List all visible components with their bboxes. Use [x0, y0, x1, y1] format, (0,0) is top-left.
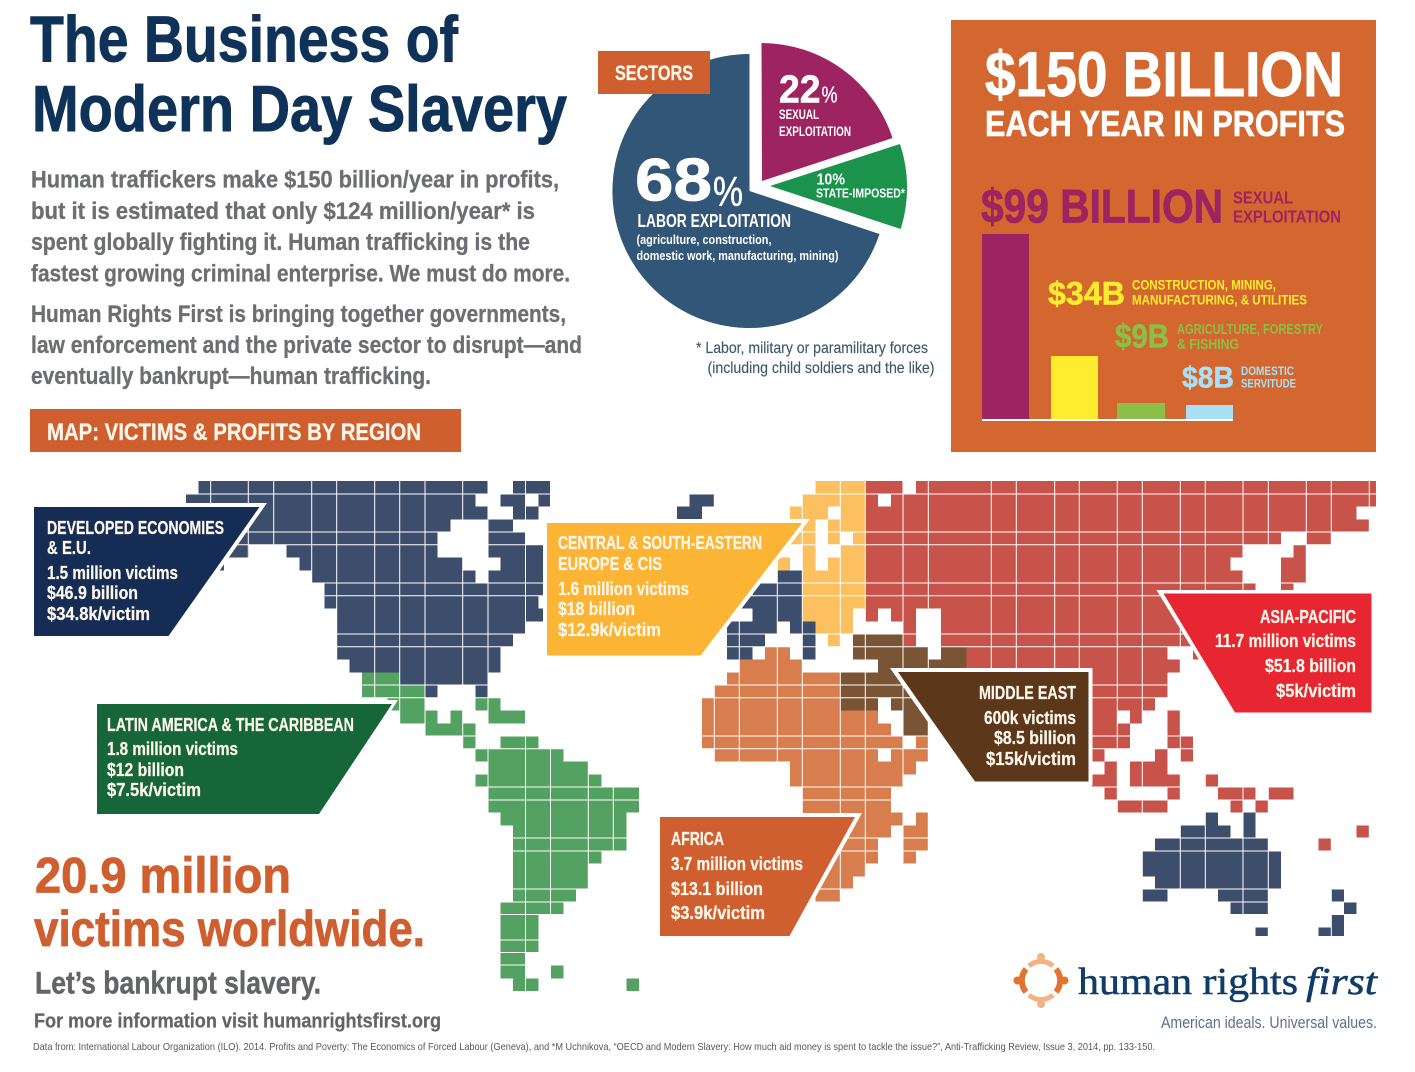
callout: asia-pacific: $5k/victim	[1276, 681, 1356, 701]
label: 68% labor: 68	[635, 146, 712, 214]
callout: central and south-eastern europe: $12.9k/victim	[558, 620, 661, 640]
bar label: sexual exploitation: SEXUAL	[1233, 188, 1293, 208]
label: 22% sexual: %	[822, 82, 838, 108]
bar label: construction: $34B	[1048, 275, 1125, 311]
callout: latin america: 1.8 million victims	[107, 739, 238, 759]
callout: central and south-eastern europe: $18 billion	[558, 599, 635, 619]
intro text: eventually bankrupt—human trafficking.	[31, 363, 431, 390]
callout: africa: $3.9k/victim	[671, 903, 765, 923]
pie slice: state-imposed	[770, 144, 907, 229]
wordmark	[1078, 961, 1379, 1003]
label: 68% labor: %	[713, 168, 743, 215]
big statistic	[34, 848, 425, 957]
bar label: construction	[1048, 275, 1307, 311]
intro text: law enforcement and the private sector to disrupt—and	[31, 332, 582, 359]
big statistic: 20.9 million	[35, 848, 291, 904]
footnote: * Labor, military or paramilitary forces	[696, 340, 928, 357]
label: 10% state-imposed: 10%	[816, 172, 845, 188]
call to action: Let’s bankrupt slavery.	[35, 964, 321, 1000]
intro text: Human traffickers make $150 billion/year in profits,	[31, 167, 559, 194]
profits headline: $150 BILLION	[985, 40, 1343, 110]
region: asia-pacific	[866, 481, 1376, 851]
callout: africa: $13.1 billion	[671, 879, 763, 899]
callout: developed economies: & E.U.	[47, 538, 91, 558]
profits headline	[985, 40, 1345, 144]
callout: central and south-eastern europe: EUROPE & CIS	[558, 554, 662, 574]
panel: sectors pie chart	[598, 43, 907, 328]
callout: developed economies: DEVELOPED ECONOMIES	[47, 518, 224, 538]
callout: middle east	[890, 668, 1092, 785]
callout: latin america: $12 billion	[107, 760, 184, 780]
callout: africa: AFRICA	[671, 829, 724, 849]
title	[30, 2, 567, 145]
intro text: Human Rights First is bringing together governments,	[31, 301, 566, 328]
intro text	[31, 167, 582, 390]
bar label: sexual exploitation: $99 BILLION	[981, 180, 1223, 233]
callout: asia-pacific: $51.8 billion	[1265, 656, 1356, 676]
profits headline: EACH YEAR IN PROFITS	[985, 103, 1345, 144]
bar label: sexual exploitation: EXPLOITATION	[1233, 207, 1341, 227]
map heading	[30, 409, 461, 452]
callout: central and south-eastern europe: CENTRAL & SOUTH-EASTERN	[558, 533, 762, 553]
callout: central and south-eastern europe	[543, 519, 810, 659]
callout: africa	[656, 813, 862, 940]
website line: For more information visit humanrightsfirst.org	[34, 1011, 441, 1033]
label: 68% labor: LABOR EXPLOITATION	[638, 211, 791, 231]
label: 22% sexual: SEXUAL	[779, 107, 819, 122]
region: africa	[702, 647, 929, 902]
region: latin america	[362, 672, 639, 991]
label: 68% labor: domestic work, manufacturing, mining)	[636, 249, 838, 263]
panel: profits	[951, 20, 1376, 452]
bar label: construction: CONSTRUCTION, MINING,	[1132, 277, 1276, 292]
callout: central and south-eastern europe: 1.6 million victims	[558, 579, 689, 599]
wordmark: first	[1306, 961, 1379, 1003]
footnote	[696, 340, 934, 377]
label: 68% labor: (agriculture, construction,	[636, 233, 772, 247]
map heading: MAP: VICTIMS & PROFITS BY REGION	[47, 419, 421, 446]
region: middle east	[840, 634, 966, 736]
callout: developed economies: $34.8k/victim	[47, 604, 150, 624]
icon: ring of people	[1014, 953, 1068, 1008]
callout: asia-pacific: ASIA-PACIFIC	[1260, 607, 1356, 627]
pie slice: labor exploitation	[612, 54, 880, 328]
callout: developed economies: 1.5 million victims	[47, 563, 178, 583]
bar label: domestic servitude	[1182, 361, 1296, 394]
title: Modern Day Slavery	[32, 72, 567, 145]
callout: asia-pacific	[1156, 590, 1373, 714]
label: 22% sexual: 22	[779, 69, 820, 112]
callout: asia-pacific: 11.7 million victims	[1215, 631, 1356, 651]
callout: middle east: $15k/victim	[986, 749, 1076, 769]
bar label: domestic servitude: SERVITUDE	[1241, 377, 1296, 391]
region: developed economies	[186, 481, 1356, 936]
callout: latin america	[93, 700, 398, 818]
bar label: agriculture: AGRICULTURE, FORESTRY	[1177, 322, 1323, 338]
callout: middle east: MIDDLE EAST	[979, 683, 1076, 703]
label: 10% state-imposed	[816, 172, 906, 200]
callout: middle east: $8.5 billion	[994, 728, 1076, 748]
bar chart	[982, 234, 1233, 421]
label: 10% state-imposed: STATE-IMPOSED*	[816, 186, 906, 200]
callout: developed economies: $46.9 billion	[47, 583, 138, 603]
bar label: agriculture	[1115, 318, 1323, 355]
callout: middle east: 600k victims	[984, 708, 1076, 728]
data source: Data from: International Labour Organization (ILO). 2014. Profits and Poverty: The Economics of Forced Labour (Geneva), and *M Uchnikova, “OECD and Modern Slavery: How much aid money is spent to tackle the issue?”, Anti-Trafficking Review, Issue 3, 2014, pp. 133-150.	[33, 1041, 1155, 1053]
callout: africa: 3.7 million victims	[671, 854, 803, 874]
intro text: but it is estimated that only $124 million/year* is	[31, 198, 535, 225]
bar label: domestic servitude: $8B	[1182, 361, 1234, 394]
big statistic: victims worldwide.	[34, 901, 425, 957]
pie slice: sexual exploitation	[762, 43, 892, 181]
logo: human rights first	[1014, 953, 1379, 1032]
callout: latin america: $7.5k/victim	[107, 780, 201, 800]
map cells	[186, 481, 1376, 991]
bar label: agriculture: & FISHING	[1177, 337, 1239, 353]
bar label: construction: MANUFACTURING, & UTILITIES	[1132, 292, 1307, 307]
intro text: fastest growing criminal enterprise. We must do more.	[31, 261, 570, 288]
wordmark: human rights	[1078, 961, 1298, 1003]
callout: latin america: LATIN AMERICA & THE CARIBBEAN	[107, 715, 354, 735]
tagline: American ideals. Universal values.	[1161, 1014, 1377, 1032]
label: 22% sexual	[779, 69, 851, 139]
sectors tag	[598, 51, 710, 94]
world map	[180, 475, 1380, 1000]
intro text: spent globally fighting it. Human trafficking is the	[31, 229, 530, 256]
title: The Business of	[30, 2, 458, 76]
bar label: domestic servitude: DOMESTIC	[1241, 364, 1294, 378]
label: 68% labor	[635, 146, 838, 263]
bar label: agriculture: $9B	[1115, 318, 1169, 355]
label: 22% sexual: EXPLOITATION	[779, 124, 851, 139]
sectors tag: SECTORS	[615, 62, 693, 85]
footnote: (including child soldiers and the like)	[708, 360, 934, 377]
callout: developed economies	[30, 503, 267, 640]
region: central europe	[777, 481, 866, 647]
